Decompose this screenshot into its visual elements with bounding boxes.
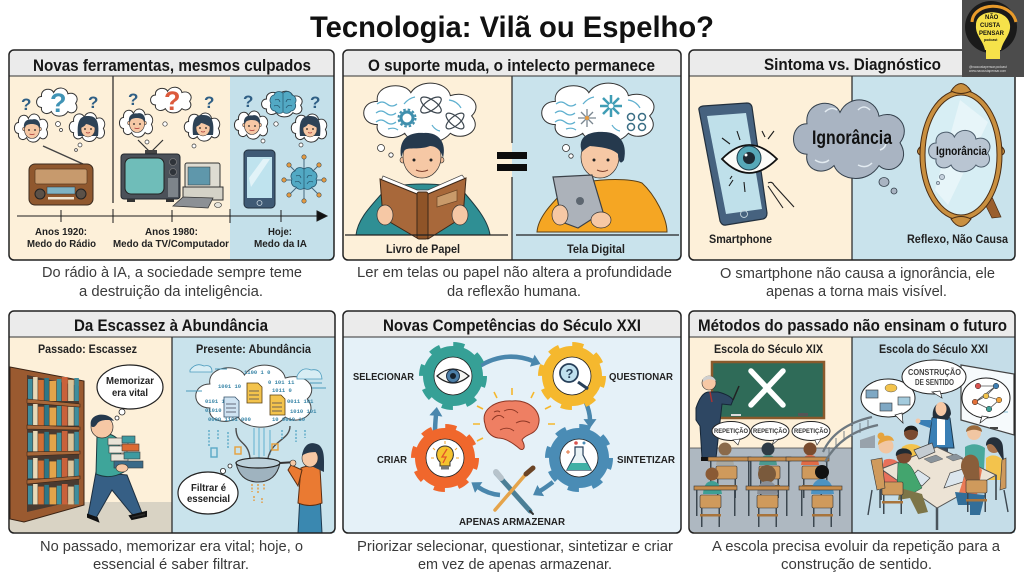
timeline arrow	[17, 209, 327, 223]
icon: bridge between schools	[823, 417, 878, 462]
icon: data cloud: 1011 0	[272, 387, 292, 394]
timeline labels: Anos 1980:	[145, 226, 198, 238]
caption: panel 6: A escola precisa evoluir da repetição para a	[712, 538, 1001, 555]
heading	[689, 50, 1015, 76]
icon: radio	[29, 146, 93, 205]
subtitles: Passado: Escassez	[38, 342, 137, 356]
heading	[9, 311, 335, 337]
data streams	[209, 426, 305, 458]
competency labels: CRIAR	[377, 454, 407, 466]
icon: man reading tablet	[537, 132, 667, 232]
icon: data cloud: 0011 101	[287, 398, 314, 405]
caption: panel 3: O smartphone não causa a ignorância, ele	[720, 265, 995, 282]
speech bubble: construcao de sentido: CONSTRUÇÃO	[908, 368, 961, 377]
caption: panel 1: Do rádio à IA, a sociedade sempre teme	[42, 264, 302, 281]
logo: Não Custa Pensar podcast: PENSAR	[979, 31, 1005, 37]
cloud: Ignorância: Ignorância	[812, 128, 892, 149]
speech bubbles: repeticao	[712, 422, 830, 445]
thought cloud: book	[364, 83, 476, 157]
cloud: Ignorância	[794, 100, 904, 194]
caption: panel 3	[720, 265, 995, 300]
equals sign	[497, 152, 527, 171]
icon: smartphone	[244, 150, 275, 208]
competency labels: SELECIONAR	[353, 371, 414, 383]
labels: Livro de Papel	[386, 242, 460, 256]
logo: Não Custa Pensar podcast: CUSTA	[980, 23, 1001, 29]
labels	[386, 242, 625, 256]
speech bubble: construcao de sentido	[902, 360, 966, 398]
icon: smartphone with eye	[699, 103, 794, 225]
caption: panel 1: a destruição da inteligência.	[79, 283, 263, 300]
heading	[9, 50, 334, 76]
subtitles: Escola do Século XIX	[714, 342, 823, 356]
speech bubbles: repeticao: REPETIÇÃO	[714, 426, 748, 435]
heading	[689, 311, 1015, 337]
icon: group table with students	[868, 425, 1008, 530]
heading: Novas ferramentas, mesmos culpados	[33, 56, 311, 75]
icon: people thinking 1980: ?	[164, 86, 180, 116]
caption: panel 2: da reflexão humana.	[447, 283, 581, 300]
gear: sintetizar	[548, 427, 610, 489]
heading: Da Escassez à Abundância	[74, 316, 268, 335]
caption: panel 5: em vez de apenas armazenar.	[418, 556, 612, 573]
icon: central brain	[473, 388, 555, 450]
icon: people thinking 1980: ?	[204, 93, 214, 112]
panel: metodos do passado	[689, 311, 1015, 533]
icon: sieve	[236, 458, 296, 503]
icon: crossed pen and brush	[495, 468, 533, 514]
heading: O suporte muda, o intelecto permanece	[368, 56, 655, 75]
subtitles	[38, 342, 311, 356]
icon: data cloud: 1001 10	[218, 383, 241, 390]
labels: Tela Digital	[567, 242, 625, 256]
icon: bookshelf	[10, 367, 84, 522]
speech bubble: network	[861, 379, 915, 423]
icon: people thinking 1920	[14, 88, 105, 151]
icon: facilitator teacher	[916, 402, 954, 461]
heading	[343, 311, 681, 337]
thought cloud: tablet	[542, 83, 654, 158]
labels: Smartphone	[709, 232, 772, 246]
panel: novas ferramentas	[9, 50, 334, 260]
icon: people thinking 1920: ?	[88, 93, 98, 112]
icon: people thinking 1920: ?	[21, 95, 31, 114]
competency labels: SINTETIZAR	[617, 454, 675, 466]
icon: data cloud: 0000 1101 000	[208, 416, 251, 423]
speech bubble: Filtrar e essencial: essencial	[187, 493, 230, 505]
caption: panel 2	[357, 264, 672, 300]
subtitles: Presente: Abundância	[196, 342, 311, 356]
icon: people thinking today: ?	[310, 93, 320, 112]
timeline labels	[27, 226, 307, 250]
timeline labels: Medo do Rádio	[27, 238, 96, 250]
caption: panel 4	[40, 538, 303, 573]
competency labels	[353, 371, 675, 528]
logo: Não Custa Pensar podcast: www.naocustapensar.com	[969, 69, 1006, 73]
caption: panel 4: No passado, memorizar era vital; hoje, o	[40, 538, 303, 555]
speech bubble: Filtrar e essencial	[178, 464, 238, 514]
icon: people thinking 1980	[119, 86, 220, 148]
panel: o suporte muda	[343, 50, 681, 260]
timeline labels: Anos 1920:	[35, 226, 87, 238]
logo: Não Custa Pensar podcast: NÃO	[985, 14, 999, 21]
speech bubbles: repeticao: REPETIÇÃO	[753, 426, 787, 435]
icon: woman filtering	[288, 443, 324, 533]
caption: panel 4: essencial é saber filtrar.	[93, 556, 249, 573]
caption: panel 3: apenas a torna mais visível.	[766, 283, 947, 300]
speech bubble: Memorizar era vital	[97, 365, 163, 420]
icon: mirror	[918, 84, 1004, 226]
icon: data cloud: 1100 1 0	[244, 369, 270, 376]
subtitles	[714, 342, 988, 356]
heading: Novas Competências do Século XXI	[383, 316, 641, 335]
logo: Não Custa Pensar podcast: podcast	[984, 38, 998, 42]
caption: panel 6	[712, 538, 1001, 573]
speech bubble: Memorizar era vital: era vital	[112, 387, 148, 399]
logo: Não Custa Pensar podcast: @naocustapensar.podcast	[969, 65, 1007, 69]
caption: panel 1	[42, 264, 302, 300]
icon: people thinking today	[234, 91, 327, 147]
speech bubble: Memorizar era vital: Memorizar	[106, 375, 154, 387]
caption: panel 6: construção de sentido.	[781, 556, 932, 573]
icon: television	[121, 140, 180, 202]
icon: data cloud: 0101 1	[205, 398, 226, 405]
icon: chalkboard	[712, 362, 824, 418]
icon: old classroom	[694, 442, 842, 527]
timeline labels: Hoje:	[268, 226, 292, 238]
icon: people thinking 1980: ?	[128, 90, 138, 109]
competency labels: QUESTIONAR	[609, 371, 673, 383]
speech bubbles: repeticao: REPETIÇÃO	[794, 426, 828, 435]
gear: questionar: ?	[566, 366, 574, 381]
icon: people thinking 1920: ?	[50, 88, 66, 118]
subtitles: Escola do Século XXI	[879, 342, 988, 356]
icon: data cloud: 0 101 11	[268, 379, 295, 386]
gear: selecionar	[422, 345, 484, 407]
icon: data cloud	[186, 365, 326, 427]
panel: novas competencias	[343, 311, 681, 533]
speech bubble: network graph	[962, 378, 1010, 423]
timeline labels: Medo da TV/Computador	[113, 238, 229, 250]
gear: questionar	[541, 345, 603, 407]
speech bubble: Filtrar e essencial: Filtrar é	[191, 482, 226, 494]
icon: data cloud: 1010 101	[290, 408, 317, 415]
icon: people thinking today: ?	[243, 92, 253, 111]
icon: man carrying books	[88, 415, 146, 521]
speech bubble: construcao de sentido: DE SENTIDO	[915, 378, 954, 387]
icon: data cloud: 10 0010 10	[272, 416, 305, 423]
caption: panel 5	[357, 538, 673, 573]
icon: teacher	[696, 376, 739, 460]
timeline labels: Medo da IA	[254, 238, 307, 250]
icon: computer	[173, 163, 223, 208]
icon: AI brain network	[282, 155, 326, 203]
gear: criar	[414, 427, 476, 489]
caption: panel 5: Priorizar selecionar, questionar, sintetizar e criar	[357, 538, 673, 555]
heading: Sintoma vs. Diagnóstico	[764, 55, 941, 74]
labels	[709, 232, 1008, 246]
icon: mirror: Ignorância	[936, 146, 988, 158]
panel: da escassez a abundancia	[9, 311, 335, 533]
heading	[343, 50, 681, 76]
icon: whiteboard	[961, 365, 1014, 435]
icon: man reading book	[356, 133, 490, 239]
panel: sintoma vs diagnostico	[689, 50, 1015, 260]
book and tablet ground lines	[345, 234, 679, 236]
labels: Reflexo, Não Causa	[907, 232, 1008, 246]
competency labels: APENAS ARMAZENAR	[459, 516, 565, 528]
icon: data cloud: 01010	[205, 407, 222, 414]
caption: panel 2: Ler em telas ou papel não altera a profundidade	[357, 264, 672, 281]
logo: Não Custa Pensar podcast	[962, 0, 1024, 77]
title: Tecnologia: Vilã ou Espelho?	[310, 11, 714, 44]
cycle arrows	[435, 357, 590, 495]
